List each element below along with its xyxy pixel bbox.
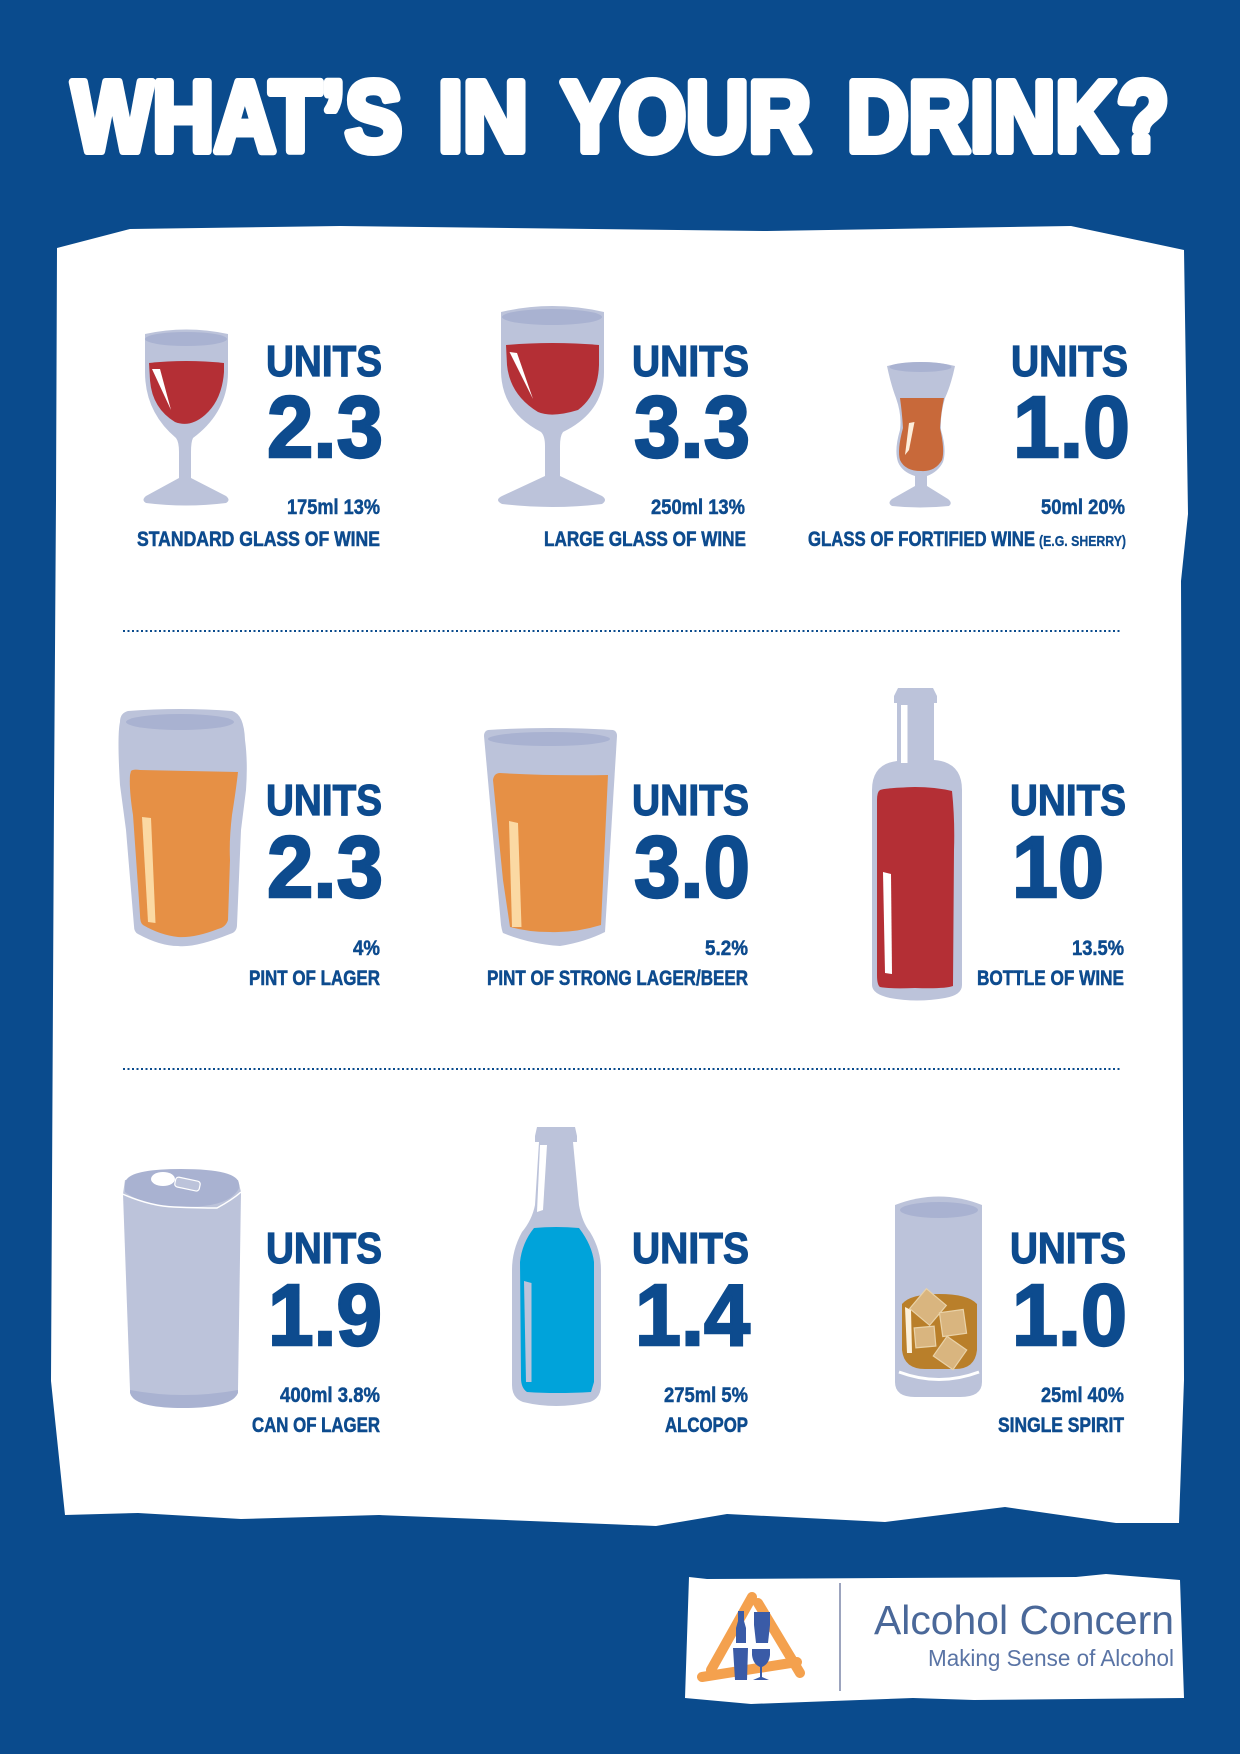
tagline: Making Sense of Alcohol	[928, 1645, 1174, 1671]
units label: UNITS	[1010, 1224, 1126, 1273]
logo divider	[839, 1583, 841, 1691]
units label: UNITS	[266, 776, 382, 825]
title: DRINK?	[847, 61, 1169, 173]
units value: 3.3	[634, 379, 750, 476]
units value: 2.3	[267, 819, 383, 916]
volume and strength: 50ml 20%	[1041, 496, 1125, 519]
drink name: ALCOPOP	[665, 1413, 748, 1437]
strength: 5.2%	[705, 937, 748, 960]
icon: wine bottle	[872, 688, 962, 1000]
units value: 2.3	[267, 379, 383, 476]
units value: 1.0	[1013, 379, 1130, 476]
icon: alcopop bottle	[512, 1127, 601, 1406]
item: standard glass of wine	[137, 330, 383, 551]
item: can of lager	[122, 1169, 382, 1437]
volume and strength: 25ml 40%	[1041, 1384, 1124, 1407]
logo panel	[685, 1574, 1184, 1704]
units value: 1.4	[635, 1267, 750, 1364]
icon: logo triangle and drinks	[702, 1597, 800, 1680]
units label: UNITS	[266, 337, 382, 386]
icon: straight pint glass	[484, 728, 617, 946]
units value: 10	[1012, 819, 1104, 916]
units label: UNITS	[632, 776, 749, 825]
volume and strength: 400ml 3.8%	[280, 1384, 380, 1407]
icon: pint glass with bulge	[118, 709, 247, 946]
icon: drinks can	[122, 1169, 241, 1408]
panel: white torn paper	[51, 226, 1188, 1526]
drink name: GLASS OF FORTIFIED WINE	[808, 527, 1035, 551]
units label: UNITS	[1011, 337, 1128, 386]
strength: 4%	[353, 937, 380, 960]
volume and strength: 250ml 13%	[651, 496, 745, 519]
divider row 2	[123, 1068, 1120, 1070]
volume and strength: 175ml 13%	[287, 496, 380, 519]
drink name: CAN OF LAGER	[252, 1413, 380, 1437]
drink name: SINGLE SPIRIT	[998, 1413, 1124, 1437]
units label: UNITS	[266, 1224, 382, 1273]
drink name: BOTTLE OF WINE	[977, 966, 1124, 990]
drink name note: (E.G. SHERRY)	[1039, 533, 1126, 550]
item: pint of strong lager or beer	[484, 728, 750, 990]
icon: sherry glass	[887, 362, 955, 508]
units label: UNITS	[632, 1224, 749, 1273]
item: large glass of wine	[498, 306, 750, 551]
drink name: PINT OF STRONG LAGER/BEER	[487, 966, 748, 990]
icon: tumbler with ice	[895, 1196, 982, 1397]
item: single spirit	[895, 1196, 1127, 1437]
divider row 1	[123, 630, 1120, 632]
units value: 1.9	[268, 1267, 382, 1364]
title: WHAT’S	[72, 61, 402, 173]
title: YOUR	[561, 61, 811, 173]
title: IN	[438, 61, 528, 173]
organisation name: Alcohol Concern	[874, 1597, 1174, 1643]
units value: 3.0	[634, 819, 750, 916]
title	[72, 61, 1169, 173]
icon: large wine glass	[498, 306, 605, 507]
drink name: PINT OF LAGER	[249, 966, 380, 990]
units value: 1.0	[1012, 1267, 1127, 1364]
item: bottle of wine	[872, 688, 1126, 1000]
item: pint of lager	[118, 709, 383, 990]
drink name: LARGE GLASS OF WINE	[544, 527, 746, 551]
icon: standard wine glass	[144, 330, 228, 506]
units label: UNITS	[1010, 776, 1126, 825]
strength: 13.5%	[1072, 937, 1124, 960]
volume and strength: 275ml 5%	[664, 1384, 748, 1407]
drink name: STANDARD GLASS OF WINE	[137, 527, 380, 551]
item: glass of fortified wine	[808, 337, 1130, 551]
item: alcopop	[512, 1127, 750, 1437]
units label: UNITS	[632, 337, 749, 386]
